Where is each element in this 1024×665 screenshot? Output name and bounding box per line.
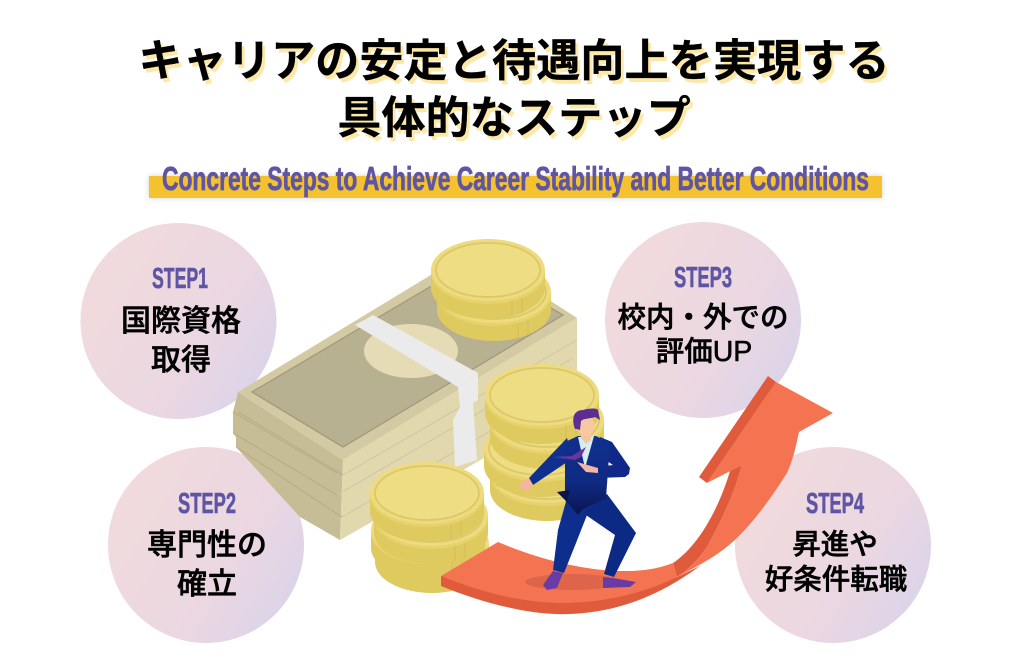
- jacket flap: [557, 490, 570, 502]
- icon: coin stack top: [431, 239, 551, 341]
- panel: step 3: 校内・外での: [617, 302, 789, 334]
- panel: step 4: [735, 447, 931, 643]
- panel: step 3: 評価UP: [656, 336, 752, 368]
- panel: step 2: 専門性の: [147, 529, 267, 562]
- back leg: [553, 498, 605, 573]
- panel: step 1: [80, 223, 276, 419]
- icon: coin stack middle: [484, 364, 604, 521]
- hair: [573, 408, 600, 430]
- panel: step 4: 昇進や: [792, 529, 878, 561]
- neck and head: [581, 430, 591, 444]
- panel: step 1: 国際資格: [121, 305, 241, 338]
- panel: step 4: STEP4: [806, 488, 864, 520]
- icon: businessman: [520, 408, 636, 590]
- hand left: [520, 478, 533, 491]
- panel: step 2: STEP2: [178, 488, 236, 520]
- panel: step 3: [605, 222, 801, 418]
- front leg: [583, 494, 636, 577]
- panel: step 1: STEP1: [152, 263, 208, 295]
- torso: [565, 436, 610, 515]
- panel: step 4: 好条件転職: [765, 564, 907, 596]
- title line 2: 具体的なステップ: [337, 94, 691, 143]
- arms: [529, 438, 573, 485]
- panel: step 2: 確立: [177, 568, 237, 601]
- arrow: [441, 376, 833, 614]
- panel: step 3: STEP3: [674, 262, 732, 294]
- icon: banknote bundle: [233, 250, 577, 540]
- tie: [553, 447, 586, 460]
- icon: coin stack front: [370, 462, 489, 593]
- panel: step 1: 取得: [151, 344, 211, 377]
- hand right: [577, 462, 598, 473]
- shoes: [543, 571, 563, 590]
- title line 1: キャリアの安定と待遇向上を実現する: [138, 37, 890, 86]
- panel: step 2: [108, 447, 304, 643]
- shirt: [578, 436, 594, 468]
